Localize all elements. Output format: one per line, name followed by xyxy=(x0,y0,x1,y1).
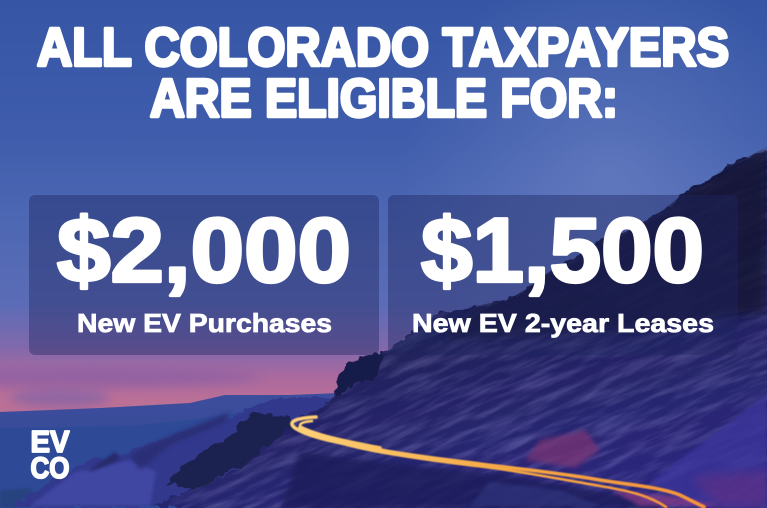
amount: $2,000: $2,000 xyxy=(57,200,351,302)
panel: $1,500 new EV 2-year leases xyxy=(388,195,738,355)
logo: EVCO xyxy=(30,424,70,485)
background photo: main mountainside xyxy=(150,147,767,508)
title xyxy=(37,18,729,128)
amount: $1,500: $1,500 xyxy=(421,200,704,302)
background photo: car light trail on the road xyxy=(292,417,704,507)
label: new EV 2-year leases: New EV 2-year Leases xyxy=(412,308,714,338)
panel: $2,000 new EV purchases xyxy=(29,195,379,355)
label: new EV purchases: New EV Purchases xyxy=(77,308,332,338)
title line 2: ARE ELIGIBLE FOR: xyxy=(150,68,618,128)
background photo: distant mountains xyxy=(0,393,340,508)
background photo: foreground hill xyxy=(10,397,340,508)
logo line: EV: EV xyxy=(30,424,70,459)
logo line: CO: CO xyxy=(30,452,70,485)
